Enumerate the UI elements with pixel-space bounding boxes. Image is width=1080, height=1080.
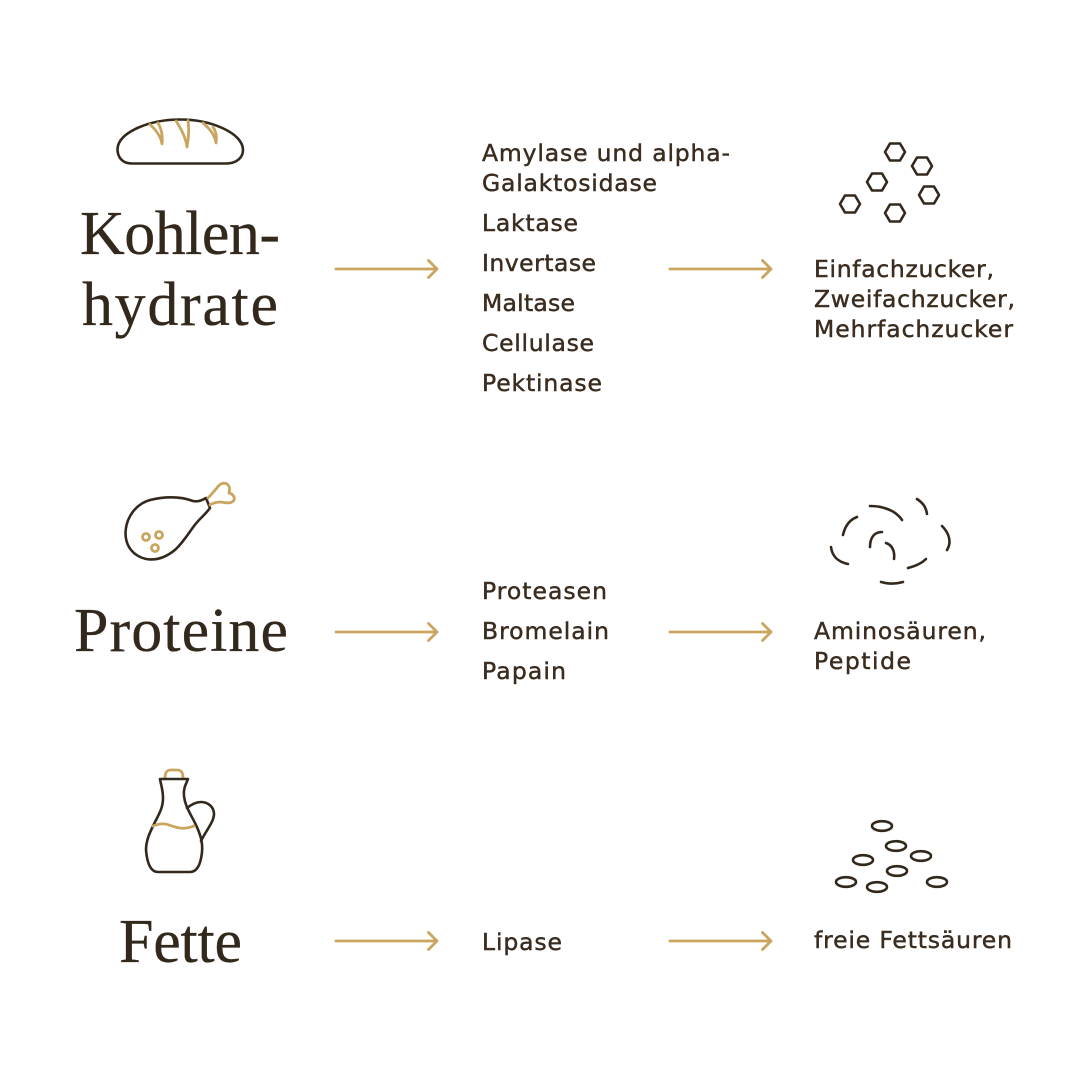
arrow: food to enzymes <box>336 932 437 950</box>
heading: Fette: Fette <box>119 908 242 976</box>
text block: sugars: Zweifachzucker, <box>814 285 1015 313</box>
text block: carbohydrate enzymes: Pektinase <box>482 369 602 397</box>
text block: carbohydrate enzymes <box>482 139 730 397</box>
panel: Fette row <box>119 770 1012 976</box>
icon: sugar hexagons <box>840 144 939 222</box>
icon: peptide strands <box>831 499 949 584</box>
heading: Kohlenhydrate: Kohlen- <box>80 200 280 268</box>
text block: free fatty acids: freie Fettsäuren <box>814 926 1012 954</box>
icon: bread <box>118 120 243 164</box>
text block: protein enzymes: Papain <box>482 657 566 685</box>
text block: amino acids: Aminosäuren, <box>814 617 986 645</box>
arrow: food to enzymes <box>336 260 437 278</box>
icon: oil jug <box>146 770 214 872</box>
text block: carbohydrate enzymes: Cellulase <box>482 329 594 357</box>
arrow: food to enzymes <box>336 624 437 640</box>
text block: fat enzyme: Lipase <box>482 928 562 956</box>
text block: sugars: Mehrfachzucker <box>814 315 1013 343</box>
text block: carbohydrate enzymes: Galaktosidase <box>482 169 657 197</box>
text block: protein enzymes: Proteasen <box>482 577 607 605</box>
heading: Kohlenhydrate: hydrate <box>82 271 278 339</box>
arrow: enzymes to products <box>670 932 771 950</box>
heading: Kohlenhydrate <box>80 200 280 339</box>
text block: sugars <box>814 255 1015 343</box>
heading: Proteine: Proteine <box>74 597 288 665</box>
text block: carbohydrate enzymes: Laktase <box>482 209 578 237</box>
text block: carbohydrate enzymes: Invertase <box>482 249 596 277</box>
text block: sugars: Einfachzucker, <box>814 255 994 283</box>
arrow: enzymes to products <box>670 624 771 640</box>
text block: protein enzymes: Bromelain <box>482 617 609 645</box>
text block: carbohydrate enzymes: Amylase und alpha- <box>482 139 730 167</box>
panel: Proteine row <box>74 483 986 685</box>
icon: fatty acid ovals <box>836 821 947 892</box>
text block: amino acids <box>814 617 986 675</box>
text block: amino acids: Peptide <box>814 647 911 675</box>
icon: chicken leg <box>126 483 234 559</box>
panel: Kohlenhydrate row <box>80 120 1015 397</box>
text block: protein enzymes <box>482 577 609 685</box>
text block: carbohydrate enzymes: Maltase <box>482 289 575 317</box>
arrow: enzymes to products <box>670 260 771 278</box>
